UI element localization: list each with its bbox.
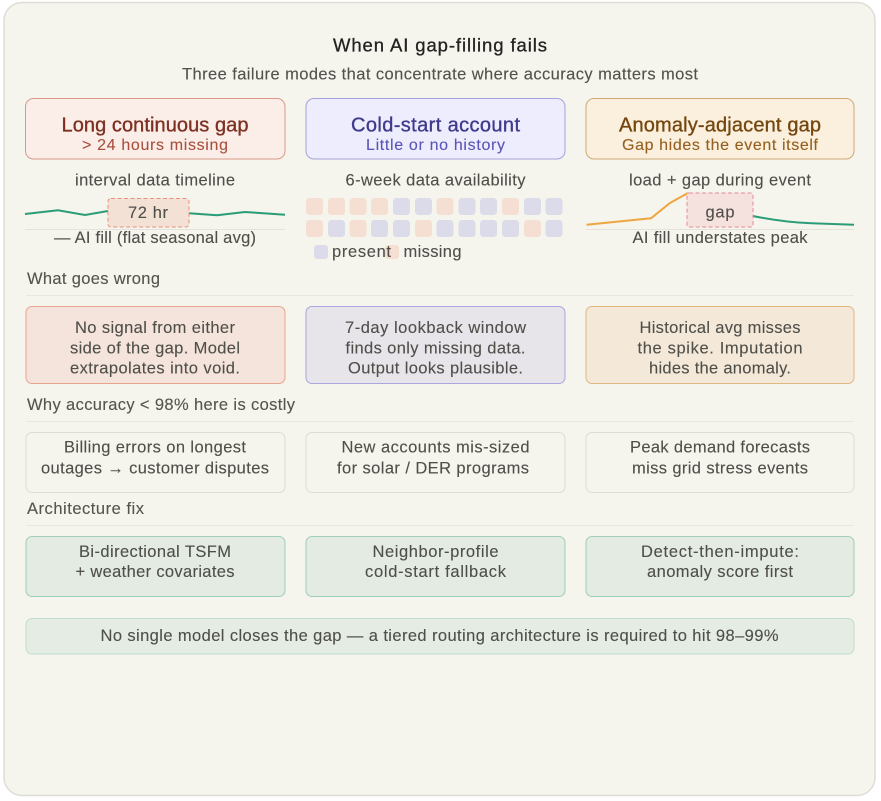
card: historical average: the spike. Imputation (638, 340, 802, 358)
header card: anomaly-adjacent gap: Gap hides the event itself (622, 137, 819, 154)
caption: AI fill flat seasonal average: — AI fill (flat seasonal avg) (54, 229, 256, 247)
card: neighbor-profile (306, 536, 565, 596)
card: lookback window (306, 306, 565, 384)
chart: interval timeline with 72 hr gap (25, 198, 285, 230)
card: peak demand: Peak demand forecasts (630, 438, 810, 456)
card: lookback window: Output looks plausible. (348, 360, 523, 378)
card: historical average: Historical avg misses (640, 319, 800, 337)
card: lookback window: finds only missing data. (346, 340, 526, 358)
card: billing errors: outages → customer disputes (41, 460, 269, 478)
header card: long continuous gap: Long continuous gap (62, 114, 248, 136)
header card: anomaly-adjacent gap (586, 98, 854, 159)
legend: present and missing: present (332, 243, 391, 261)
panel: cold-start account column (306, 98, 565, 261)
card: neighbor-profile: Neighbor-profile (372, 543, 498, 561)
panel: long continuous gap column (25, 98, 285, 247)
chart label: load and gap during event: load + gap during event (629, 172, 811, 190)
card: no signal: side of the gap. Model (70, 340, 240, 358)
card: bi-directional TSFM (26, 536, 285, 596)
card: bi-directional TSFM: + weather covariates (76, 563, 234, 581)
card: historical average (586, 306, 854, 384)
card: no signal (26, 306, 285, 384)
chart label: interval data timeline: interval data timeline (75, 172, 235, 190)
section heading: architecture fix: Architecture fix (27, 500, 145, 518)
card: new accounts: for solar / DER programs (337, 460, 529, 478)
card: bi-directional TSFM: Bi-directional TSFM (79, 543, 231, 561)
header card: cold-start account: Cold-start account (351, 114, 520, 136)
subtitle: Three failure modes that concentrate where accuracy matters most (182, 66, 698, 84)
header card: cold-start account (306, 98, 565, 159)
chart: availability grid (306, 198, 562, 237)
chart: interval timeline with 72 hr gap: 72 hr (128, 204, 168, 222)
caption: AI fill understates peak: AI fill understates peak (632, 229, 808, 247)
card: new accounts (306, 432, 565, 492)
card: neighbor-profile: cold-start fallback (365, 563, 507, 581)
card: billing errors: Billing errors on longest (64, 438, 246, 456)
card: billing errors (26, 432, 285, 492)
chart: load spike with hidden gap (586, 193, 854, 230)
title: When AI gap-filling fails (333, 34, 547, 56)
card: detect-then-impute: anomaly score first (647, 563, 793, 581)
card: no signal: extrapolates into void. (70, 360, 240, 378)
section heading: what goes wrong: What goes wrong (27, 270, 160, 288)
card: detect-then-impute (586, 536, 854, 596)
card: no signal: No signal from either (75, 319, 236, 337)
card: lookback window: 7-day lookback window (345, 319, 526, 337)
header card: anomaly-adjacent gap: Anomaly-adjacent gap (619, 114, 821, 136)
chart label: 6-week data availability: 6-week data availability (346, 172, 526, 190)
header card: long continuous gap (26, 98, 285, 159)
card: historical average: hides the anomaly. (649, 360, 791, 378)
header card: long continuous gap: > 24 hours missing (82, 137, 228, 154)
section heading: why accuracy is costly: Why accuracy < 98% here is costly (27, 396, 296, 414)
legend: present and missing (314, 243, 462, 261)
card: new accounts: New accounts mis-sized (342, 438, 530, 456)
legend: present and missing: missing (404, 243, 462, 261)
callout: tiered routing conclusion: No single model closes the gap — a tiered routing architecture is required to hit 98–99% (100, 627, 779, 645)
chart: load spike with hidden gap: gap (706, 204, 734, 222)
panel: anomaly-adjacent gap column (586, 98, 854, 247)
callout: tiered routing conclusion (26, 618, 854, 654)
card: peak demand (586, 432, 854, 492)
header card: cold-start account: Little or no history (366, 137, 505, 154)
card: detect-then-impute: Detect-then-impute: (641, 543, 799, 561)
card: peak demand: miss grid stress events (632, 460, 808, 478)
